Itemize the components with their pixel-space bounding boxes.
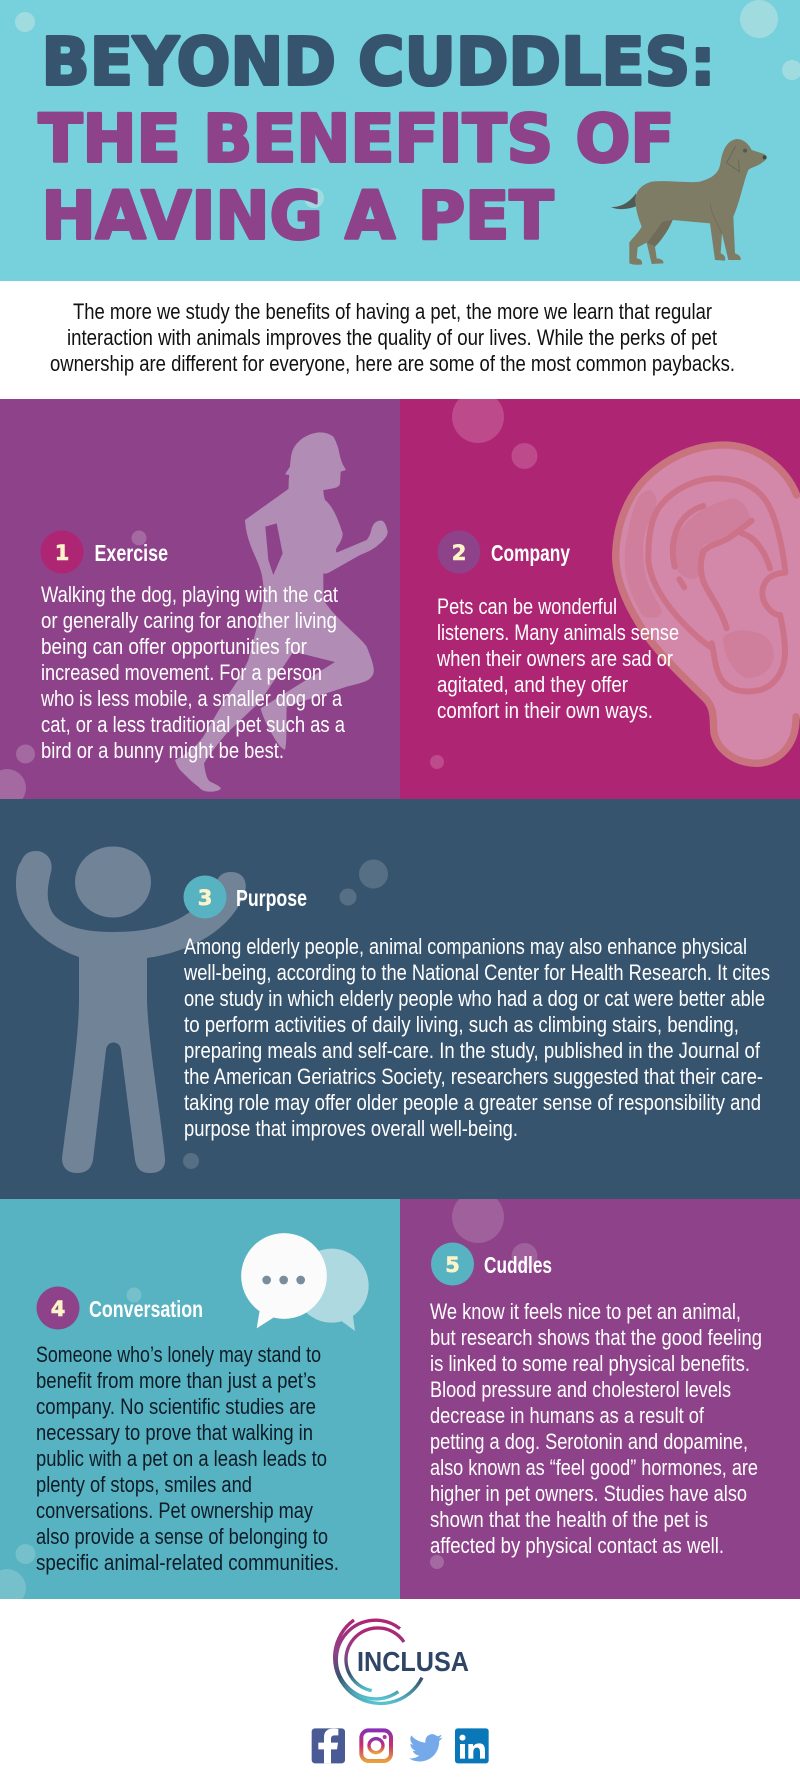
text: exercise: cat, or a less traditional pet such as a — [41, 712, 346, 737]
icon: instagram — [361, 1730, 391, 1761]
panel: cuddles — [400, 1191, 800, 1599]
text: exercise: Walking the dog, playing with the cat — [41, 582, 338, 607]
intro text — [50, 299, 735, 376]
icon: twitter — [409, 1734, 443, 1761]
text: conversation — [36, 1342, 339, 1575]
logo: Inclusa: INCLUSA — [357, 1646, 469, 1677]
text: conversation: public with a pet on a leash leads to — [36, 1446, 327, 1471]
text: exercise — [40, 582, 346, 763]
icon: facebook — [312, 1728, 345, 1763]
text: cuddles: decrease in humans as a result of — [430, 1403, 705, 1428]
text: exercise: increased movement. For a person — [41, 660, 322, 685]
number badge 3: 3 — [198, 886, 212, 910]
icon: ear — [616, 445, 800, 763]
panel: header — [0, 0, 800, 281]
number badge 4: 4 — [51, 1297, 65, 1321]
text: company: when their owners are sad or — [436, 646, 673, 671]
number badge 1 — [40, 530, 84, 574]
icon: runner silhouette — [175, 432, 388, 792]
panel: exercise — [0, 399, 400, 807]
icon: person with raised arms — [16, 846, 246, 1173]
text: conversation: also provide a sense of belonging to — [36, 1524, 328, 1549]
text: exercise: bird or a bunny might be best. — [41, 738, 284, 763]
title — [38, 24, 716, 254]
heading: exercise: Exercise — [94, 540, 168, 566]
text: conversation: necessary to prove that walking in — [36, 1420, 313, 1445]
panel: purpose — [0, 799, 800, 1199]
text: conversation: company. No scientific studies are — [36, 1394, 316, 1419]
text: exercise: or generally caring for another living — [41, 608, 337, 633]
text: company: agitated, and they offer — [437, 672, 628, 697]
number badge 5: 5 — [445, 1253, 460, 1277]
text: purpose — [183, 934, 770, 1141]
number badge 1: 1 — [55, 541, 69, 565]
number badge 2 — [438, 530, 480, 574]
number badge 3 — [184, 876, 226, 918]
heading: purpose: Purpose — [236, 885, 307, 911]
text: conversation: plenty of stops, smiles and — [36, 1472, 252, 1497]
text: cuddles: shown that the health of the pet is — [430, 1507, 708, 1532]
text: conversation: specific animal-related communities. — [36, 1550, 339, 1575]
text: company: Pets can be wonderful — [437, 594, 617, 619]
number badge 2: 2 — [452, 541, 466, 565]
text: cuddles — [430, 1299, 762, 1558]
number badge 4 — [36, 1286, 80, 1330]
icon: speech bubbles — [241, 1233, 369, 1331]
title: BEYOND CUDDLES: — [42, 24, 716, 100]
panel: conversation — [0, 1199, 400, 1607]
text: conversation: conversations. Pet ownership may — [36, 1498, 313, 1523]
title: HAVING A PET — [42, 178, 554, 254]
heading: conversation: Conversation — [89, 1296, 203, 1322]
logo: Inclusa — [335, 1620, 469, 1703]
icon: linkedin — [455, 1728, 489, 1763]
text: conversation: benefit from more than just a pet’s — [36, 1368, 316, 1393]
text: company: listeners. Many animals sense — [437, 620, 679, 645]
number badge 5 — [431, 1242, 474, 1286]
text: cuddles: Blood pressure and cholesterol levels — [430, 1377, 731, 1402]
text: cuddles: We know it feels nice to pet an animal, — [430, 1299, 741, 1324]
text: exercise: who is less mobile, a smaller dog or a — [40, 686, 343, 711]
heading: company: Company — [491, 540, 570, 566]
icon: dog — [611, 139, 767, 265]
text: exercise: being can offer opportunities for — [41, 634, 307, 659]
heading: cuddles: Cuddles — [484, 1252, 552, 1278]
text: purpose: purpose that improves overall well-being. — [184, 1116, 518, 1141]
text: company: comfort in their own ways. — [437, 698, 653, 723]
title: THE BENEFITS OF — [38, 100, 674, 178]
text: cuddles: affected by physical contact as well. — [430, 1533, 724, 1558]
panel: company — [400, 391, 800, 799]
text: conversation: Someone who’s lonely may stand to — [36, 1342, 321, 1367]
text: company — [436, 594, 679, 723]
